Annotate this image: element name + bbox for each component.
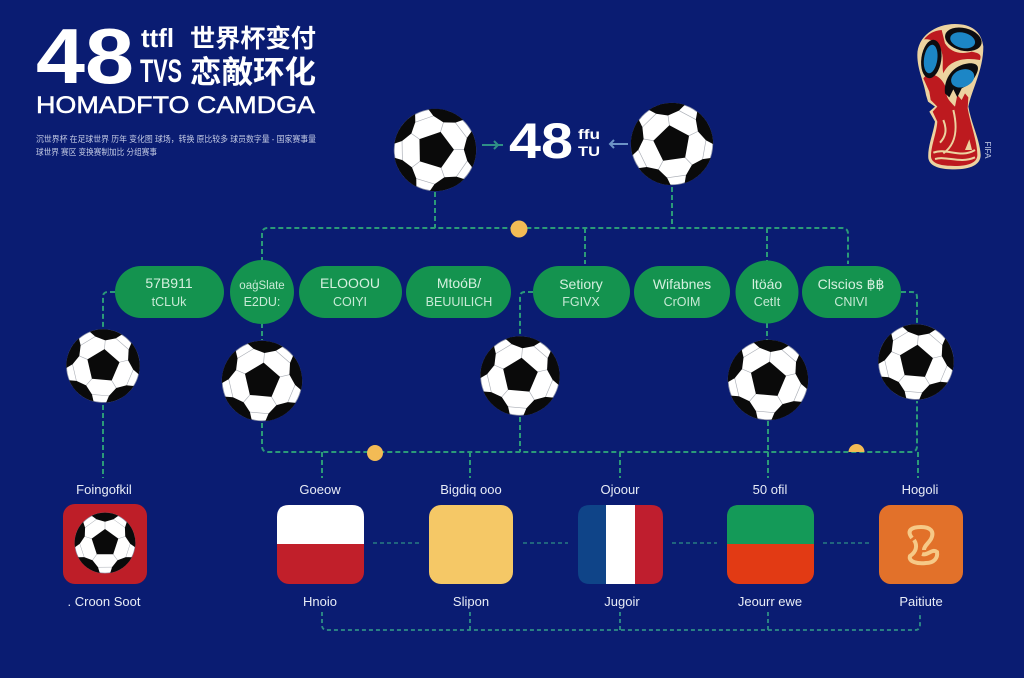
subtitle: HOMADFTO CAMDGA bbox=[36, 92, 315, 119]
pill 4: BEUUILICH bbox=[426, 295, 492, 309]
team 3 yellow tile bbox=[429, 505, 513, 584]
team 4 bottom label: Jugoir bbox=[604, 594, 640, 609]
arrow: right ball to number bbox=[610, 140, 628, 148]
pill 3 bbox=[299, 266, 402, 318]
icon: world cup trophy bbox=[917, 24, 992, 169]
circle 2: oaģSlate bbox=[239, 279, 285, 292]
team 2 bbox=[277, 482, 364, 609]
team 1 top label: Foingofkil bbox=[76, 482, 132, 497]
pill 1: tCLUk bbox=[152, 295, 187, 309]
pill 6 bbox=[634, 266, 730, 318]
title unit bbox=[140, 23, 182, 89]
title chinese bbox=[190, 25, 316, 90]
circle 7: CetIt bbox=[754, 295, 781, 309]
description: 沉世界杯 在足球世界 历年 变化图 球场，转换 原比较多 球员数字量 - 国家赛事量 bbox=[36, 134, 316, 144]
pill 1: 57B911 bbox=[145, 275, 193, 291]
team 3 bottom label: Slipon bbox=[453, 594, 489, 609]
team 2 flag white red bbox=[277, 505, 364, 584]
gold node top bbox=[510, 220, 528, 238]
description: 球世界 赛区 变换赛制加比 分组赛事 bbox=[36, 147, 157, 157]
team 5 flag green orange bbox=[727, 505, 814, 584]
pill 8: CNIVI bbox=[834, 295, 868, 309]
team 6 bottom label: Paitiute bbox=[899, 594, 943, 609]
center number label: ffu bbox=[578, 126, 600, 142]
center number label: TU bbox=[578, 143, 600, 159]
team 6 orange tile with emblem bbox=[879, 505, 963, 584]
pill 5: FGIVX bbox=[562, 295, 600, 309]
team 4 bbox=[578, 482, 663, 609]
football row 1 bbox=[60, 326, 146, 409]
panel: green category row bbox=[115, 260, 901, 324]
football row 4 bbox=[721, 336, 815, 427]
pill 8 bbox=[802, 266, 901, 318]
title number 48: 48 bbox=[36, 12, 134, 100]
pill 1 bbox=[115, 266, 224, 318]
circle 2: E2DU: bbox=[244, 295, 280, 309]
title unit: TVS bbox=[140, 53, 182, 89]
team 2 bottom label: Hnoio bbox=[303, 594, 337, 609]
pill 5 bbox=[533, 266, 630, 318]
team 6 top label: Hogoli bbox=[902, 482, 939, 497]
pill 4 bbox=[406, 266, 511, 318]
circle 7: ltöáo bbox=[752, 276, 782, 292]
team 1 bbox=[63, 482, 147, 609]
team 4 flag blue white red bbox=[578, 505, 663, 584]
title unit: ttfl bbox=[141, 23, 174, 53]
arrow: left ball to number bbox=[482, 141, 503, 149]
pill 6: CrOIM bbox=[664, 295, 700, 309]
pill 3: COIYI bbox=[333, 295, 367, 309]
team 3 bbox=[429, 482, 513, 609]
football row 5 bbox=[872, 321, 960, 406]
description bbox=[36, 134, 316, 157]
pill 6: Wifabnes bbox=[653, 276, 711, 292]
circle 2 bbox=[230, 260, 294, 324]
title chinese: 世界杯变付 bbox=[190, 25, 316, 53]
gold node right bbox=[848, 444, 864, 452]
top left football bbox=[379, 98, 490, 205]
team 6 bbox=[879, 482, 963, 609]
top right football bbox=[622, 97, 722, 194]
connector network bbox=[103, 187, 920, 630]
gold node middle bbox=[367, 445, 383, 461]
team 1 tile with football bbox=[63, 504, 147, 584]
team 4 top label: Ojoour bbox=[600, 482, 640, 497]
pill 4: MtoóB/ bbox=[437, 275, 481, 291]
title chinese: 恋敵环化 bbox=[190, 55, 316, 90]
team 1 bottom label: . Croon Soot bbox=[68, 594, 141, 609]
football row 3 bbox=[473, 333, 566, 422]
team 2 top label: Goeow bbox=[299, 482, 341, 497]
title block bbox=[36, 12, 316, 157]
center number label: 48 bbox=[509, 113, 573, 169]
team 5 bbox=[727, 482, 814, 609]
football row 2 bbox=[215, 337, 309, 428]
team 5 top label: 50 ofil bbox=[753, 482, 787, 497]
circle 7 bbox=[736, 260, 798, 324]
center number label bbox=[509, 113, 600, 169]
pill 3: ELOOOU bbox=[320, 275, 380, 291]
pill 8: Clscios ฿฿ bbox=[818, 276, 884, 292]
team 3 top label: Bigdiq ooo bbox=[440, 482, 502, 497]
team 5 bottom label: Jeourr ewe bbox=[738, 594, 802, 609]
icon: world cup trophy: FIFA bbox=[983, 142, 992, 159]
pill 5: Setiory bbox=[559, 276, 603, 292]
